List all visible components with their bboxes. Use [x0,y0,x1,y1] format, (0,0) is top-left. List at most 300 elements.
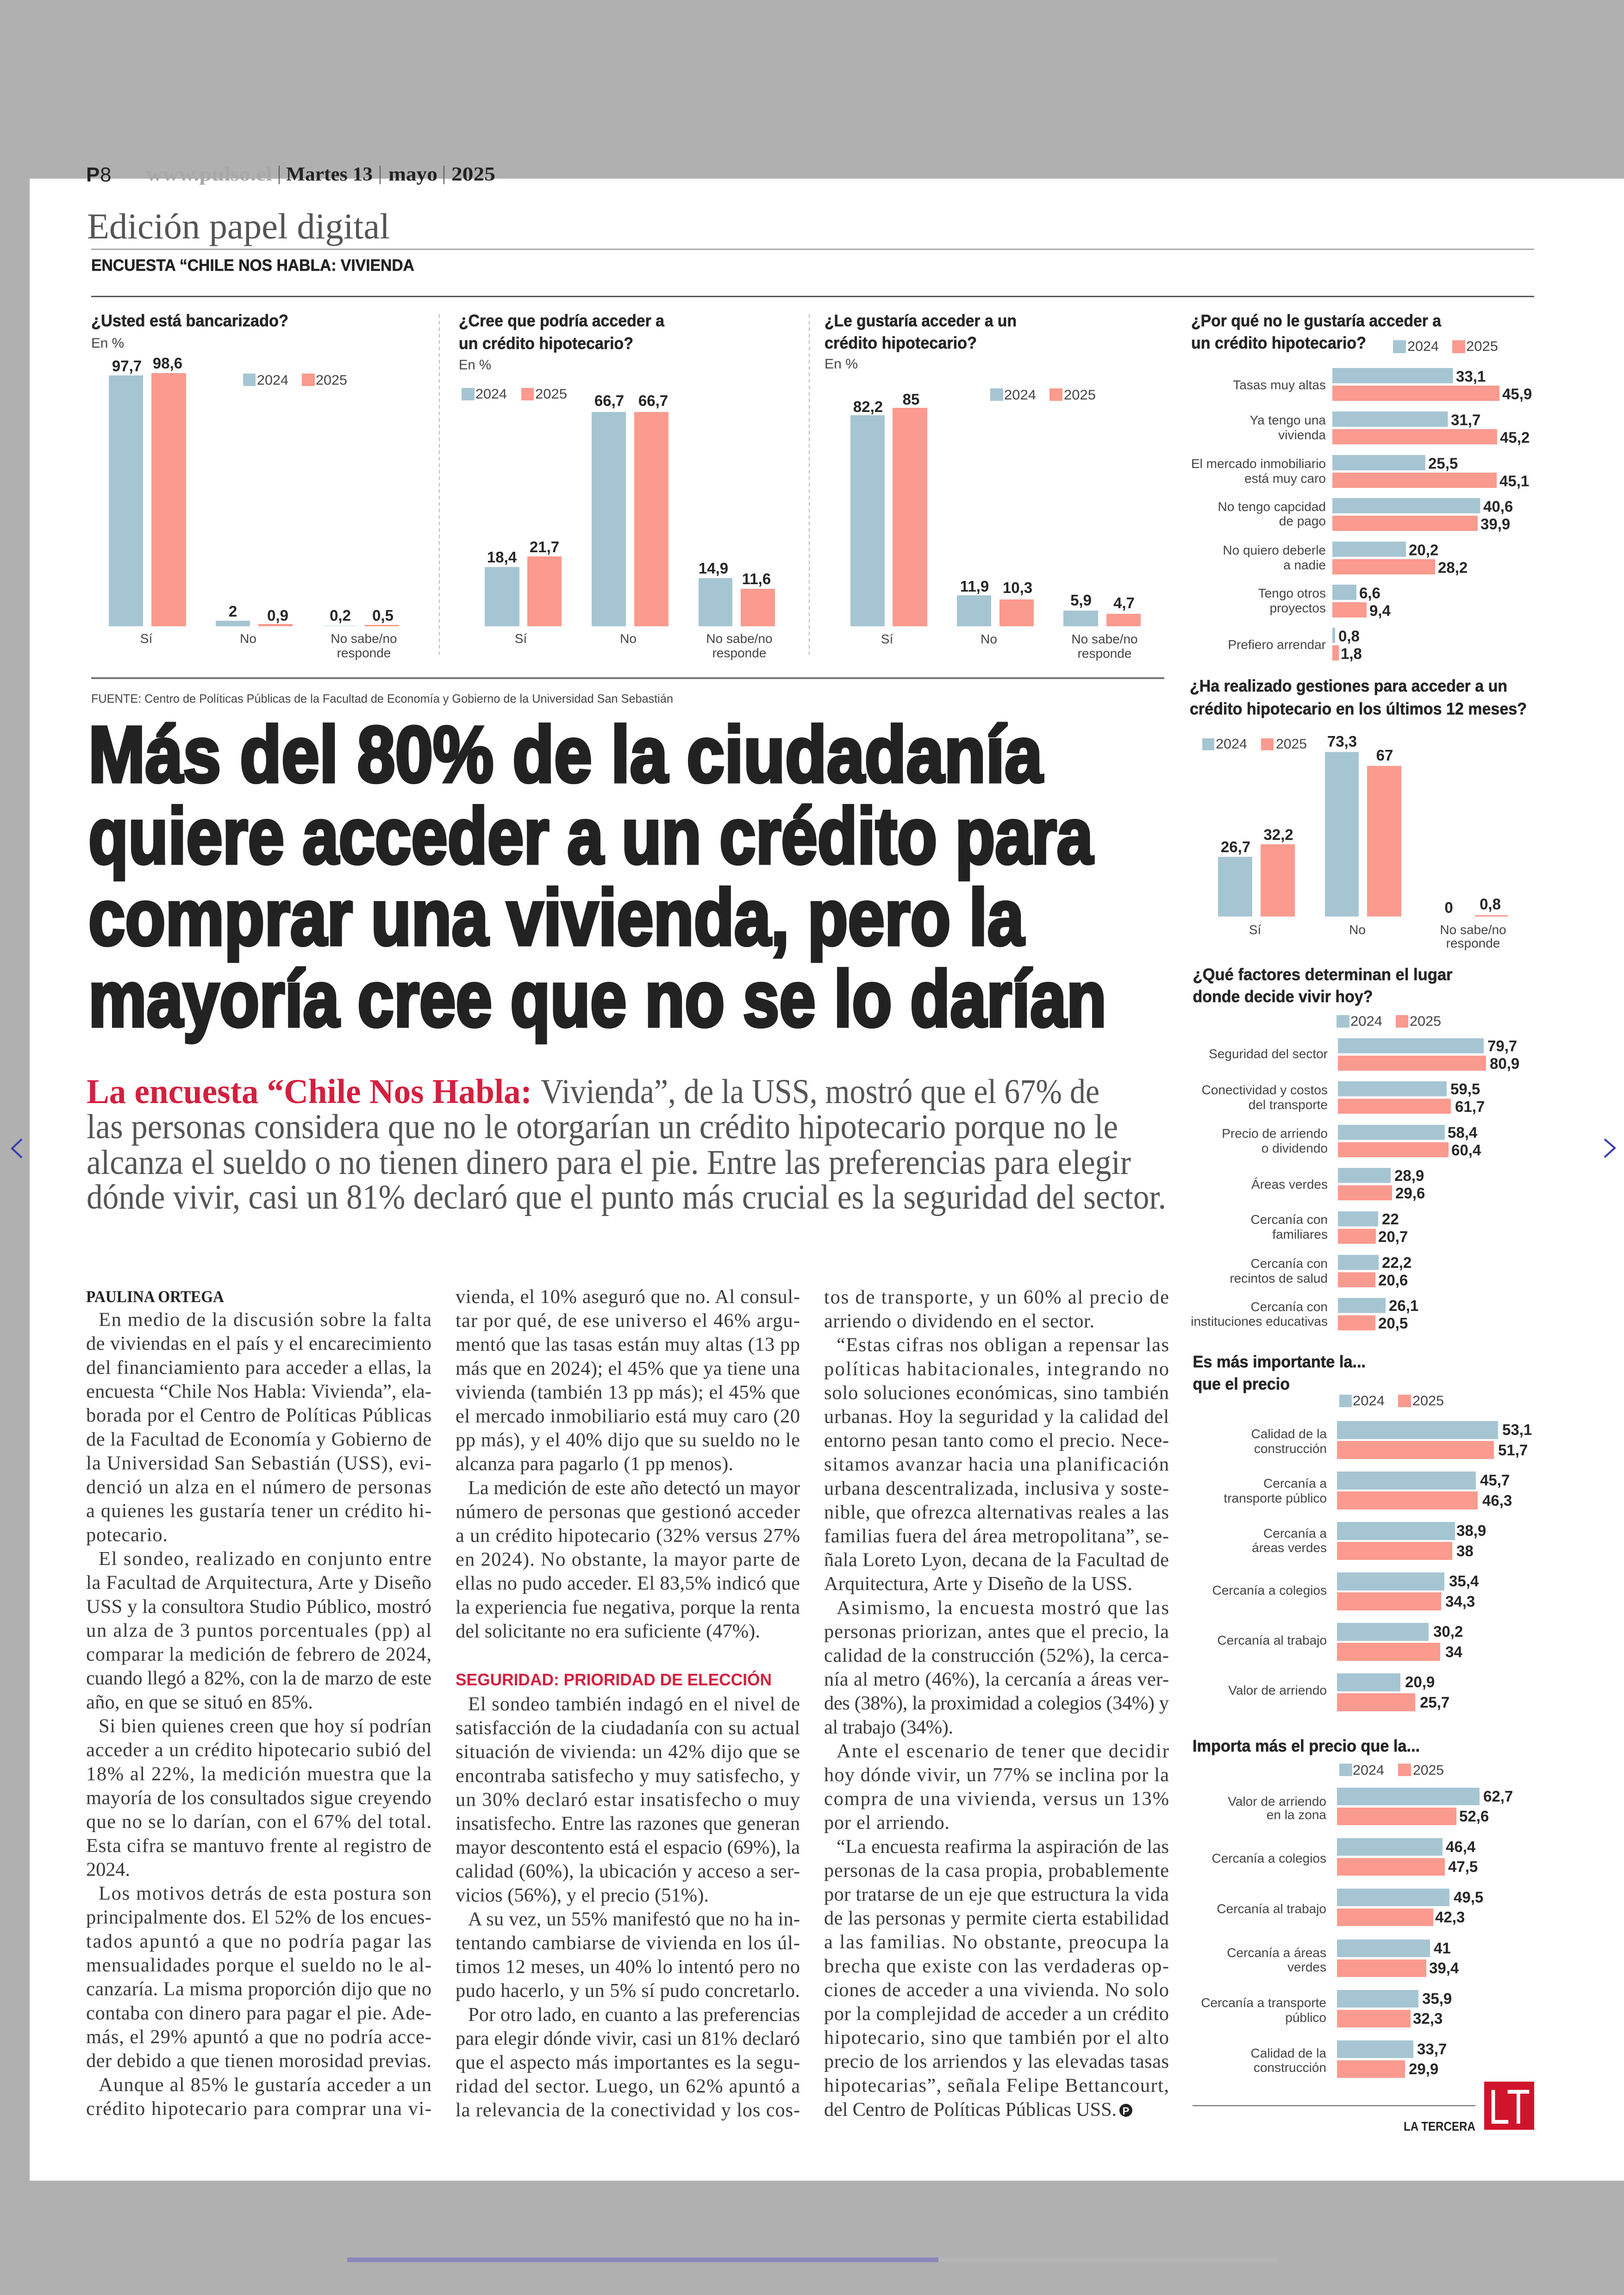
article column 1: potecario. [86,1524,168,1546]
article column 1: mensualidades porque el sueldo no le al- [86,1954,431,1976]
categories: No [240,631,256,646]
credit: La Tercera: LA TERCERA [1404,2119,1475,2133]
article column 3: personas de la casa propia, probablemente [824,1859,1169,1881]
article column 3: ciones de acceder a una vivienda. No solo [824,1979,1169,2001]
article column 3: calidad de la construcción (52%), la cerca- [824,1645,1169,1666]
legend: 2024 [1407,339,1439,354]
categories: No quiero deberle [1223,543,1326,557]
categories: Cercanía a [1263,1526,1327,1540]
categories: El mercado inmobiliario [1191,456,1326,471]
values [1405,1421,1532,1711]
values: 33,1 [1456,368,1486,385]
categories: de pago [1279,514,1326,528]
values: 30,2 [1433,1623,1463,1640]
categories: responde [712,646,766,660]
values: 51,7 [1498,1441,1528,1459]
values: 26,1 [1389,1297,1418,1314]
categories: Cercanía al trabajo [1217,1902,1326,1916]
scrollbar [347,2258,1278,2262]
values: 5,9 [1070,592,1092,609]
chart title: un crédito hipotecario? [459,334,633,353]
values: 1,8 [1341,645,1362,662]
headline [88,710,1106,1043]
article column 2: tentando cambiarse de vivienda en los úl- [456,1932,800,1954]
categories: transporte público [1224,1491,1327,1505]
categories: Valor de arriendo [1228,1683,1327,1697]
categories: Cercanía a colegios [1212,1583,1327,1597]
values: 66,7 [638,392,668,409]
values: 82,2 [853,398,883,415]
chart title: ¿Le gustaría acceder a un [824,311,1017,330]
article column 2: vivienda (también 13 pp más); el 45% que [456,1381,800,1403]
lead paragraph [87,1073,1166,1216]
article column 2: pudo hacerlo, y un 5% sí pudo concretarlo. [456,1980,800,2002]
icon: end mark [1119,2104,1132,2117]
categories: Prefiero arrendar [1228,637,1326,652]
article column 1: principalmente dos. El 52% de los encues- [86,1907,431,1928]
chart title [459,311,665,353]
categories: construcción [1254,2060,1326,2075]
values: 25,5 [1428,455,1458,472]
categories: Tengo otros [1258,586,1326,600]
page header: folio and date: www.pulso.el [146,164,272,185]
article column 3: por la complejidad de acceder a un crédito [824,2003,1169,2025]
article column 3: al trabajo (34%). [824,1716,953,1738]
page header: folio and date: P [86,163,100,186]
chart: ¿Por qué no le gustaría acceder a un crédito hipotecario? [1191,311,1532,662]
values: 33,7 [1417,2040,1447,2058]
article column 3: “Estas cifras nos obligan a repensar las [837,1334,1169,1356]
legend [990,387,1096,403]
legend [1337,1014,1441,1029]
article column 1: crédito hipotecario para comprar una vi- [86,2098,431,2120]
values: 14,9 [699,560,728,577]
bars [1218,752,1508,917]
values: 73,3 [1327,733,1357,750]
categories: Áreas verdes [1251,1177,1328,1191]
values: 46,3 [1482,1492,1512,1509]
section heading: ENCUESTA “CHILE NOS HABLA: VIVIENDA [91,256,414,274]
article column 1: de la Facultad de Economía y Gobierno de [86,1428,431,1450]
article column 1: tados apuntó a que no podría pagar las [86,1930,431,1952]
article column 1: Los motivos detrás de esta postura son [99,1883,431,1904]
article column 3: compra de una vivienda, versus un 13% [824,1788,1169,1810]
article column 2: que el aspecto más importantes es la segu- [456,2052,800,2073]
values: 20,6 [1378,1272,1408,1289]
article column 2: del solicitante no era suficiente (47%). [456,1620,760,1642]
legend: 2024 [1350,1014,1382,1029]
values: 0 [1444,899,1453,916]
article column 3: arriendo o dividendo en el sector. [824,1310,1094,1332]
article column 2: alcanza para pagarlo (1 pp menos). [456,1453,733,1475]
article column 3: a las familias. No obstante, preocupa la [824,1931,1169,1953]
article column 3: urbanas. Hoy la seguridad y la calidad del [824,1406,1169,1428]
categories: No sabe/no [706,631,773,646]
values: 42,3 [1435,1908,1465,1926]
bars [1338,1038,1486,1330]
article column 1 [86,1287,431,2120]
categories [881,632,1138,661]
article column 3: brecha que existe con las verdaderas op- [824,1955,1169,1977]
values: 22 [1382,1210,1399,1228]
values: 34,3 [1445,1593,1475,1610]
article column 1: mayoría de los consultados sigue creyendo [86,1787,431,1809]
values: 28,2 [1438,559,1468,576]
article column 1: Si bien quienes creen que hoy sí podrían [99,1715,431,1737]
categories: Valor de arriendo [1228,1794,1326,1809]
categories: Ya tengo una [1249,413,1326,427]
lead paragraph: Vivienda”, de la USS, mostró que el 67% de [541,1073,1099,1111]
legend [1339,1763,1444,1778]
legend: 2025 [1466,339,1498,354]
article column 2: en 2024). No obstante, la mayor parte de [456,1549,800,1571]
categories: No sabe/no [331,631,397,646]
values: 0,8 [1480,895,1501,913]
lead paragraph: alcanza el sueldo o no tienen dinero para el pie. Entre las preferencias para elegir [87,1143,1131,1182]
chart title: donde decide vivir hoy? [1193,987,1373,1006]
article column 2: número de personas que gestionó acceder [456,1501,800,1522]
legend: 2024 [1216,736,1247,752]
article column 2: calidad (60%), la ubicación y acceso a ser- [456,1860,800,1882]
headline: Más del 80% de la ciudadanía [88,710,1043,799]
categories: recintos de salud [1230,1271,1328,1285]
categories: vivienda [1278,428,1326,442]
categories: No tengo capcidad [1218,499,1326,514]
article column 1: acceder a un crédito hipotecario subió del [86,1739,431,1761]
article column 2: el mercado inmobiliario está muy caro (20 [456,1405,800,1427]
article column 1: más, el 29% apuntó a que no podría acce- [86,2026,431,2048]
values: 45,1 [1499,472,1529,490]
categories: proyectos [1270,601,1326,615]
legend: 2025 [1410,1014,1441,1029]
chart title [824,311,1017,352]
article column 3: por tratarse de un eje que estructura la vida [824,1883,1169,1905]
values: 45,7 [1480,1472,1510,1489]
chart title [1190,676,1527,718]
article column 2: ellas no pudo acceder. El 83,5% indicó que [456,1572,800,1594]
values: 38 [1456,1542,1474,1559]
article column 1: de viviendas en el país y el encarecimiento [86,1333,431,1354]
article column 1: 18% al 22%, la medición muestra que la [86,1763,431,1785]
values: 18,4 [487,549,517,566]
values: 21,7 [530,538,559,555]
values: 11,9 [960,578,989,595]
categories: No [620,631,637,646]
article column 3: solo soluciones económicas, sino también [824,1382,1169,1403]
categories: Cercanía al trabajo [1217,1633,1327,1647]
article column 2: El sondeo también indagó en el nivel de [468,1693,800,1715]
legend: 2024 [1004,387,1036,403]
article column 2: A su vez, un 55% manifestó que no ha in- [468,1908,800,1930]
categories: responde [1078,646,1131,661]
chart title: ¿Usted está bancarizado? [91,311,288,330]
article column 3: tos de transporte, y un 60% al precio de [824,1286,1169,1308]
article column 3: entorno pesan tanto como el precio. Nece- [824,1430,1169,1452]
article column 2: Por otro lado, en cuanto a las preferencias [468,2004,800,2026]
categories: Conectividad y costos [1202,1083,1328,1097]
article column 1: Aunque al 85% le gustaría acceder a un [99,2074,431,2095]
article column 1: cuando llegó a 82%, con la de marzo de este [86,1667,431,1689]
values: 67 [1376,747,1393,764]
article column 1: der debido a que tienen morosidad previas. [86,2050,431,2072]
article column 1: encuesta “Chile Nos Habla: Vivienda”, ela- [86,1380,431,1403]
categories: Sí [881,632,893,646]
categories: construcción [1254,1441,1327,1456]
article column 2: satisfacción de la ciudadanía con su actual [456,1717,800,1739]
values: 29,6 [1395,1185,1425,1202]
categories: Sí [1249,923,1261,937]
values: 0,2 [330,607,351,624]
chart title [1193,1352,1366,1393]
lead paragraph: La encuesta “Chile Nos Habla: [87,1073,532,1111]
values: 49,5 [1454,1889,1483,1906]
byline: PAULINA ORTEGA [86,1287,224,1306]
article column 2: la experiencia fue negativa, porque la renta [456,1597,800,1618]
article column 2: ridad del sector. Luego, un 62% apuntó a [456,2076,800,2097]
article column 3: Ante el escenario de tener que decidir [837,1740,1169,1762]
chart: ¿Usted está bancarizado? [91,311,399,660]
source note: FUENTE: Centro de Políticas Públicas de la Facultad de Economía y Gobierno de la Universidad San Sebastián [91,692,673,705]
categories: áreas verdes [1252,1540,1327,1555]
bars [850,408,1141,626]
values: 32,3 [1413,2010,1443,2027]
categories: responde [337,646,391,660]
arrow: previous page [12,1139,22,1158]
article column 3: políticas habitacionales, integrando no [824,1358,1169,1380]
categories: o dividendo [1262,1141,1328,1155]
article column 3: urbana descentralizada, inclusiva y soste- [824,1478,1169,1499]
legend: 2024 [1353,1763,1384,1778]
categories: verdes [1287,1960,1326,1974]
categories [1191,378,1326,652]
values: 46,4 [1446,1838,1476,1855]
values: 0,5 [372,607,394,624]
page header: folio and date: Martes 13 [286,164,373,185]
bars [485,412,775,626]
values: 0,9 [267,607,288,624]
article column 2: timos 12 meses, un 40% lo intentó pero no [456,1956,800,1978]
categories: Cercanía con [1250,1300,1328,1314]
article column 2: situación de vivienda: un 42% dijo que se [456,1741,800,1763]
article column 2: un 30% declaró estar insatisfecho o muy [456,1789,800,1810]
chart: ¿Qué factores determinan el lugar donde decide vivir hoy? [1191,965,1519,1332]
chart title: ¿Por qué no le gustaría acceder a [1191,311,1442,330]
icon: end mark: P [1123,2105,1129,2117]
article column 3: hipotecario, sino que también por el alto [824,2027,1169,2049]
categories: Cercanía a colegios [1212,1851,1326,1865]
values: 11,6 [742,570,771,587]
article column 2: vicios (56%), y el precio (51%). [456,1884,709,1906]
article column 1: 2024. [86,1858,130,1880]
categories: Sí [140,631,152,646]
chart: ¿Cree que podría acceder a un crédito hipotecario? [459,311,775,660]
article column 1: un alza de 3 puntos porcentuales (pp) al [86,1620,431,1641]
article column 2: a un crédito hipotecario (32% versus 27% [456,1525,800,1547]
bars [109,373,399,626]
categories: instituciones educativas [1191,1314,1328,1328]
values [1409,1788,1513,2077]
values: 2 [229,603,237,620]
article column 3: des (38%), la proximidad a colegios (34%) y [824,1692,1169,1714]
categories: del transporte [1249,1098,1328,1112]
article column 1: del financiamiento para acceder a ellas, la [86,1357,431,1378]
values: 20,5 [1378,1315,1408,1332]
legend [1202,736,1307,752]
categories: familiares [1272,1227,1328,1241]
chart title: ¿Ha realizado gestiones para acceder a un [1190,676,1507,695]
categories: Cercanía a [1263,1476,1327,1491]
bars [1332,368,1499,661]
values: 61,7 [1455,1098,1485,1115]
categories: a nadie [1283,558,1326,572]
article column 3: personas priorizan, antes que el precio, la [824,1621,1169,1642]
values: 45,9 [1502,385,1532,403]
article column 2: insatisfecho. Entre las razones que generan [456,1813,800,1834]
page header: folio and date [86,163,495,186]
values: 39,4 [1429,1959,1459,1977]
logo: LT: LT [1488,2080,1530,2134]
values: 26,7 [1221,838,1250,855]
chart title: Es más importante la... [1193,1352,1366,1371]
categories [515,631,773,660]
article column 1: En medio de la discusión sobre la falta [99,1309,431,1330]
article column 2: pp más), y el 40% dijo que su sueldo no le [456,1429,800,1451]
article column 1: denció un alza en el número de personas [86,1476,431,1498]
values: 47,5 [1448,1858,1478,1875]
article column 3: nía al metro (46%), la cercanía a áreas ver- [824,1669,1169,1690]
categories: en la zona [1267,1808,1326,1822]
values: 9,4 [1369,602,1391,619]
legend: 2025 [535,387,567,402]
chart title: ¿Cree que podría acceder a [459,311,665,330]
chart title: ¿Qué factores determinan el lugar [1193,965,1453,984]
article column 2: la relevancia de la conectividad y los cos- [456,2099,800,2121]
legend: 2025 [1412,1393,1444,1409]
categories: Calidad de la [1251,2046,1326,2060]
chart: ¿Ha realizado gestiones? [1190,676,1527,950]
values: 97,7 [112,357,142,374]
article column 1: contaba con dinero para pagar el pie. Ade- [86,2002,431,2024]
values: 62,7 [1483,1788,1513,1805]
values [853,391,1135,611]
article column 1: a quienes les gustaría tener un crédito hi- [86,1500,431,1522]
article column 2: para elegir dónde vivir, casi un 81% declaró [456,2027,800,2049]
categories: Cercanía a áreas [1227,1946,1326,1960]
values: 20,7 [1378,1228,1408,1245]
values: 45,2 [1500,429,1530,446]
chart title: Importa más el precio que la... [1193,1736,1420,1755]
bars [1337,1788,1480,2078]
headline: comprar una vivienda, pero la [88,873,1024,962]
legend: 2025 [1064,387,1096,403]
categories: Sí [515,631,527,646]
categories: Cercanía con [1250,1256,1328,1271]
categories: Cercanía a transporte [1201,1996,1326,2010]
categories [140,631,397,660]
chart title: crédito hipotecario en los últimos 12 meses? [1190,699,1527,718]
article column 2: mayor descontento está el espacio (69%), la [456,1837,800,1858]
values: 34 [1445,1643,1462,1660]
categories: No [981,632,997,646]
article column 1: USS y la consultora Studio Público, mostró [86,1596,431,1617]
article column 3: hipotecarias”, señala Felipe Bettancourt, [824,2075,1169,2096]
article column 1: año, en que se situó en 85%. [86,1691,313,1713]
article column 1: comparar la medición de febrero de 2024, [86,1644,431,1665]
values: 20,2 [1409,542,1438,558]
legend: 2024 [1353,1393,1385,1409]
categories: No sabe/no [1440,923,1506,937]
article column 3: ñala Loreto Lyon, decana de la Facultad de [824,1549,1169,1571]
page header: folio and date: mayo [388,164,437,185]
values: 52,6 [1459,1808,1489,1825]
chart: ¿Le gustaría acceder a un crédito hipotecario? [824,311,1141,661]
lead paragraph: las personas considera que no le otorgarían un crédito hipotecario porque no le [87,1108,1118,1146]
values: 38,9 [1456,1522,1486,1539]
page header: folio and date: 2025 [451,164,495,185]
values: 53,1 [1502,1421,1532,1438]
chart: Importa más el precio que la... [1193,1736,1513,2078]
values: 0,8 [1338,628,1360,644]
article column 3: Asimismo, la encuesta mostró que las [837,1597,1169,1619]
lead paragraph: dónde vivir, casi un 81% declaró que el punto más crucial es la seguridad del sector. [87,1178,1166,1216]
values [112,355,394,624]
values: 60,4 [1451,1141,1481,1159]
categories [1201,1794,1326,2075]
legend [462,387,567,402]
values: 35,4 [1449,1572,1479,1590]
categories: Precio de arriendo [1222,1126,1328,1141]
values: 66,7 [594,392,624,409]
legend [1339,1393,1444,1409]
article column 3: hoy dónde vivir, un 77% se inclina por la [824,1764,1169,1786]
legend [243,373,347,388]
categories: responde [1446,936,1500,950]
legend: 2025 [1276,736,1307,752]
categories: público [1285,2010,1326,2025]
subheading: SEGURIDAD: PRIORIDAD DE ELECCIÓN [456,1670,772,1689]
categories: Cercanía con [1250,1212,1328,1227]
chart title [1193,965,1453,1006]
legend: 2025 [1413,1763,1444,1778]
edition label: Edición papel digital [87,206,390,246]
chart title: un crédito hipotecario? [1191,333,1366,352]
article column 1: que no se lo darían, con el 67% del total. [86,1811,431,1833]
article column 1: la Facultad de Arquitectura, Arte y Diseño [86,1572,431,1594]
chart title: crédito hipotecario? [824,333,977,352]
chart: ¿Cree que podría acceder a un crédito hipotecario?: En % [459,357,491,373]
values: 4,7 [1113,594,1135,611]
values [487,392,771,587]
values: 22,2 [1382,1254,1412,1271]
headline: mayoría cree que no se lo darían [88,954,1106,1043]
values [1338,368,1532,662]
values: 40,6 [1483,498,1513,515]
article column 2: tar por qué, de ese universo el 46% argu- [456,1310,800,1332]
values: 28,9 [1394,1167,1424,1184]
values: 10,3 [1003,579,1032,596]
values: 85 [903,391,919,408]
article column 2: mentó que las tasas están muy altas (13 pp [456,1334,800,1355]
categories: está muy caro [1244,471,1326,486]
article column 2: vienda, el 10% aseguró que no. Al consul- [456,1286,800,1308]
chart title: que el precio [1193,1374,1290,1393]
values: 39,9 [1480,516,1510,532]
article column 3: sitamos avanzar hacia una planificación [824,1453,1169,1475]
categories [1191,1047,1328,1328]
article column 2: encontraba satisfecho y muy satisfecho, y [456,1765,800,1787]
values: 32,2 [1263,826,1293,843]
article column 3: de las personas y permite cierta estabilidad [824,1908,1169,1929]
